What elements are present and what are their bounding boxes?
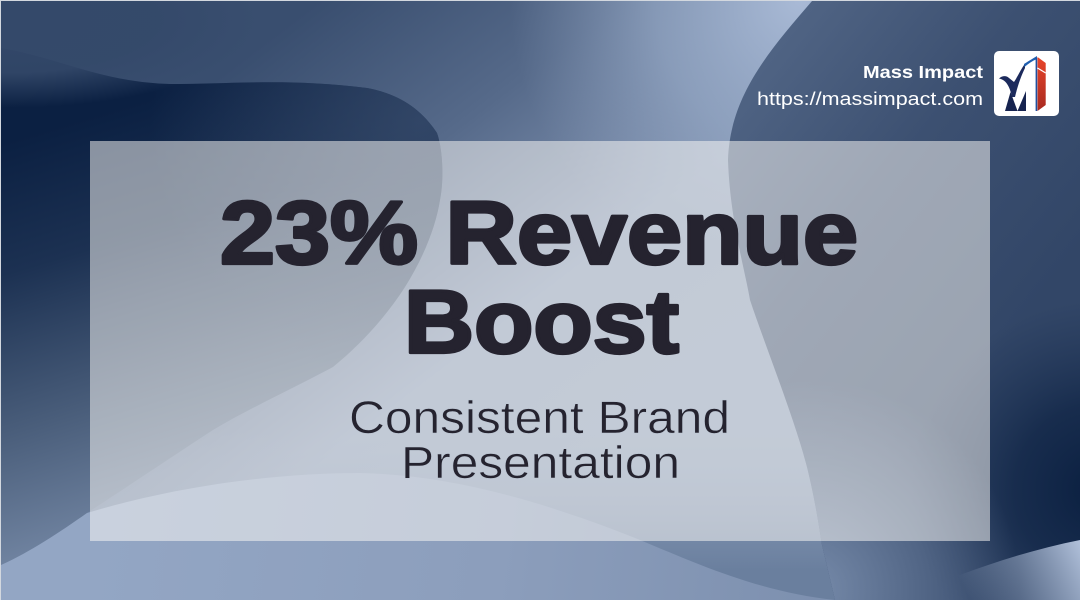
background: bottom right light corner: [870, 540, 1080, 600]
background: top left soft edge: [1, 1, 271, 111]
background: light wave bottom: [1, 473, 835, 600]
background: top sheen: [480, 1, 820, 301]
title: 23% Revenue Boost: 23% Revenue: [220, 182, 858, 282]
subtitle: Consistent Brand Presentation: Presentation: [401, 437, 680, 488]
brand name and url: https://massimpact.com: [757, 89, 983, 109]
subtitle: Consistent Brand Presentation: [349, 392, 730, 488]
background: lower band shading: [1, 430, 1080, 600]
background: dark flowing shape right: [728, 1, 1080, 600]
brand name and url: Mass Impact: [863, 62, 983, 82]
title: 23% Revenue Boost: [220, 182, 858, 372]
subtitle: Consistent Brand Presentation: Consistent Brand: [349, 392, 730, 443]
brand name and url: [757, 62, 983, 109]
background: dark flowing shape top left: [1, 48, 442, 565]
title: 23% Revenue Boost: Boost: [404, 272, 679, 372]
panel: translucent card: [90, 141, 990, 541]
icon: Mass Impact logo: [994, 51, 1059, 116]
